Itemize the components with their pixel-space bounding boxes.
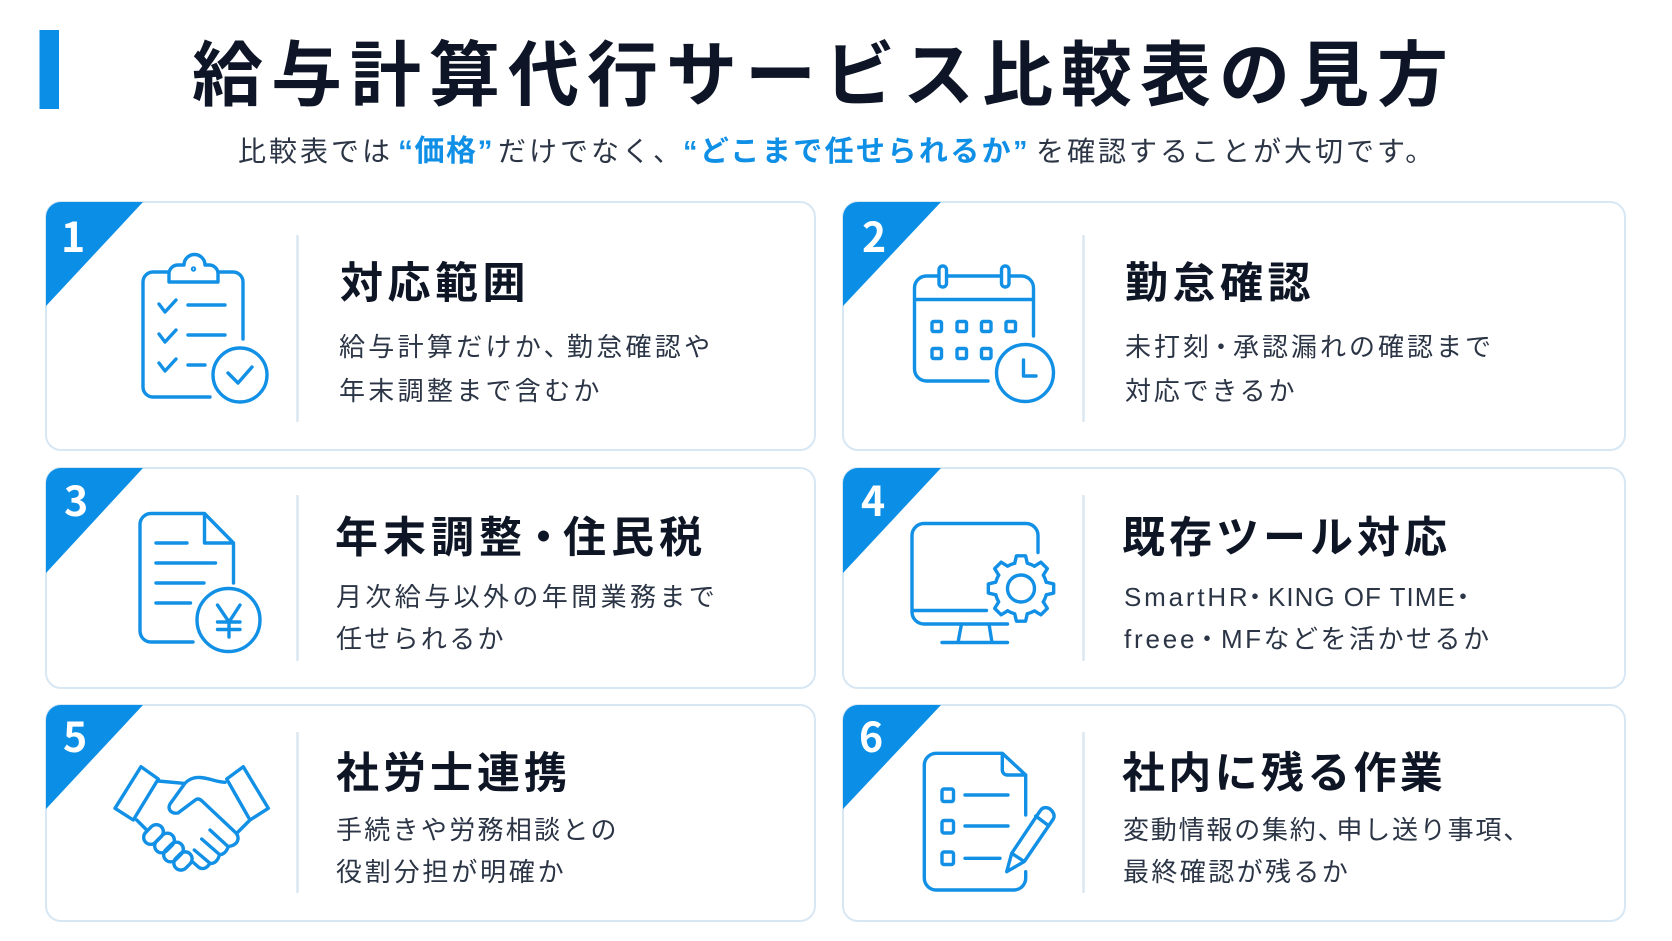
icon: clipboard checklist (143, 255, 267, 402)
accent bar (40, 30, 59, 109)
text: description 3: 月次給与以外の年間業務まで (336, 582, 718, 612)
text: description 1 (339, 332, 713, 406)
heading: 社労士連携: 社労士連携 (336, 750, 571, 798)
text: description 6 (1123, 815, 1531, 887)
number badge 1: 1 (61, 204, 85, 264)
subtitle: “価格” (398, 135, 494, 168)
number badge 2: 2 (862, 204, 886, 264)
heading: 社内に残る作業: 社内に残る作業 (1122, 750, 1446, 798)
panel: card 2 (843, 202, 1625, 450)
text: description 1: 年末調整まで含むか (339, 376, 603, 406)
text: description 4 (1124, 582, 1492, 654)
number badge 6: 6 (859, 704, 883, 764)
icon: checklist with pencil (924, 753, 1054, 890)
title: 給与計算代行サービス比較表の見方 (192, 37, 1456, 116)
number badge 1 (46, 202, 143, 306)
subtitle: を確認することが大切です。 (1036, 136, 1436, 167)
text: description 5: 役割分担が明確か (336, 857, 566, 887)
text: description 4: ・ (1450, 582, 1479, 612)
text: description 1: 給与計算だけか、勤怠確認や (339, 332, 713, 362)
panel: card 3 (46, 468, 815, 688)
panel: card 5 (46, 704, 815, 921)
text: description 5: 手続きや労務相談との (336, 815, 619, 845)
heading: 対応範囲: 対応範囲 (340, 260, 530, 308)
heading: 勤怠確認: 勤怠確認 (1125, 260, 1315, 308)
number badge 4 (843, 468, 941, 573)
icon: monitor with gear (912, 524, 1054, 642)
text: description 6: 変動情報の集約、申し送り事項、 (1123, 815, 1531, 845)
text: description 4: SmartHR (1124, 582, 1250, 612)
text: description 6: 最終確認が残るか (1123, 857, 1350, 887)
subtitle: “どこまで任せられるか” (683, 135, 1030, 168)
number badge 3: 3 (64, 468, 88, 528)
icon: calendar and clock (914, 266, 1054, 402)
text: description 4: ・ (1194, 624, 1223, 654)
text: description 4: MFなどを活かせるか (1221, 624, 1492, 654)
text: description 4: KING OF TIME (1268, 582, 1456, 612)
number badge 6 (843, 704, 941, 809)
number badge 5 (46, 704, 143, 809)
icon: handshake (115, 767, 268, 873)
number badge 2 (843, 202, 941, 306)
text: description 4: ・ (1242, 582, 1271, 612)
panel: card 1 (46, 202, 815, 450)
text: description 2 (1125, 332, 1494, 406)
heading: 年末調整・住民税: 年末調整・住民税 (335, 514, 707, 562)
icon: document with yen coin (140, 514, 260, 652)
number badge 4: 4 (861, 468, 885, 528)
text: description 3: 任せられるか (336, 624, 506, 654)
subtitle: 比較表では (238, 136, 393, 167)
number badge 3 (46, 468, 143, 573)
text: description 5 (336, 815, 619, 887)
panel: card 6 (843, 704, 1625, 921)
panel: card 4 (843, 468, 1625, 688)
text: description 2: 対応できるか (1125, 376, 1297, 406)
subtitle: だけでなく、 (498, 136, 684, 167)
text: description 3 (336, 582, 718, 654)
heading: 既存ツール対応: 既存ツール対応 (1122, 514, 1451, 562)
text: description 4: freee (1124, 624, 1197, 654)
text: description 2: 未打刻・承認漏れの確認まで (1125, 332, 1494, 362)
number badge 5: 5 (63, 704, 87, 764)
